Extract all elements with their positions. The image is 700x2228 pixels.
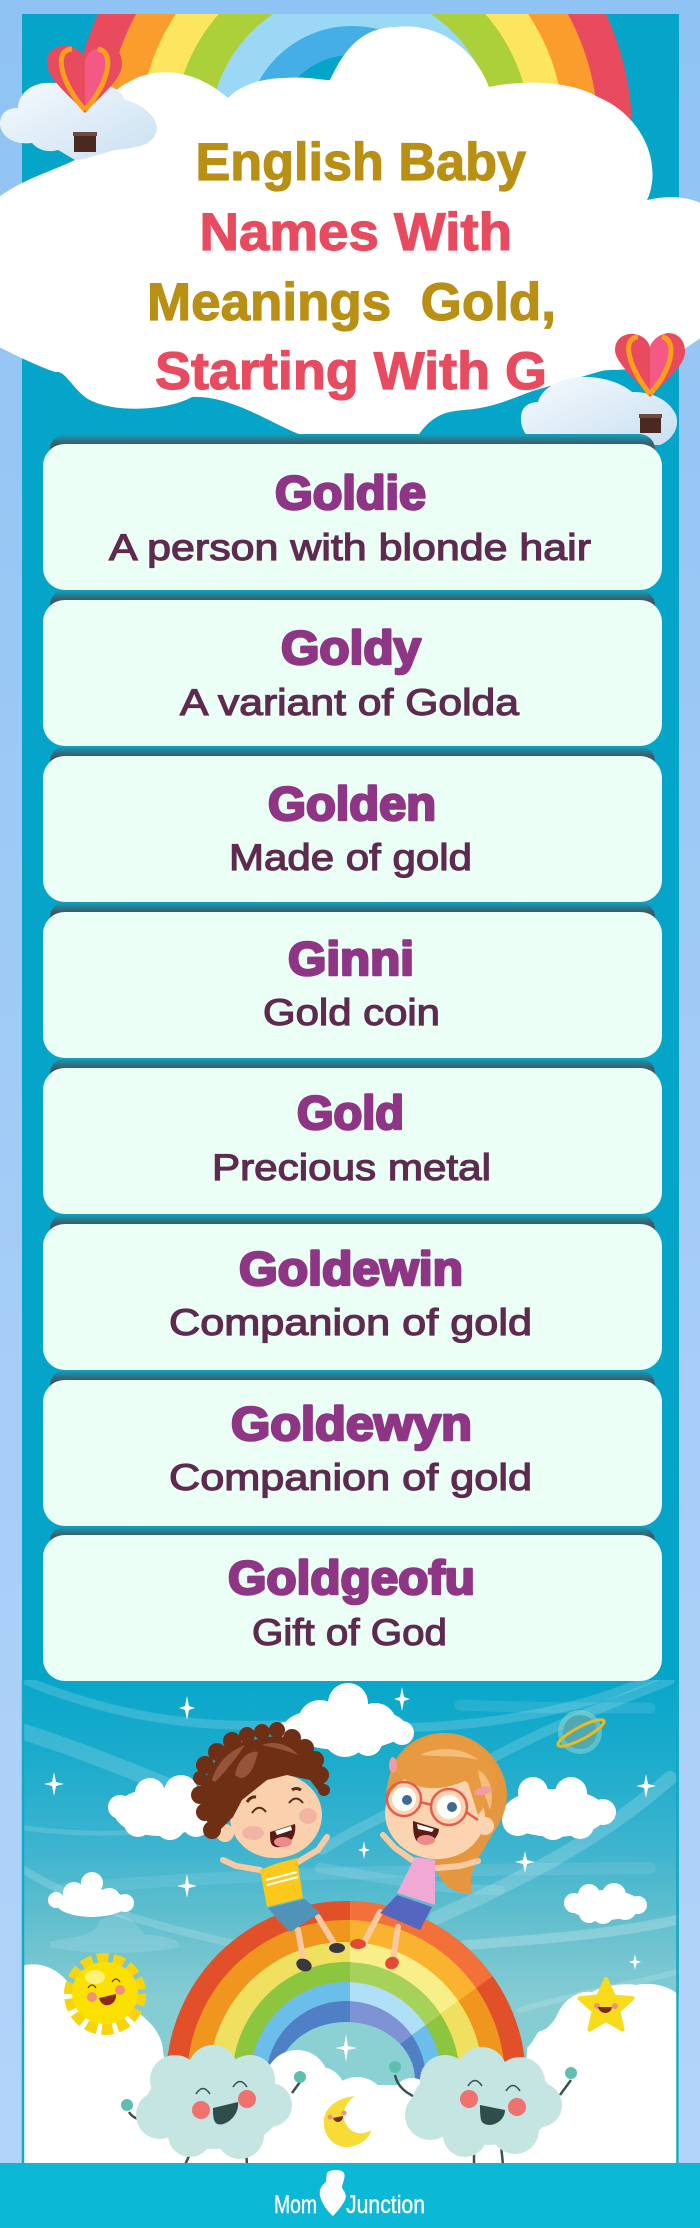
title: Starting With G: [155, 342, 547, 401]
logo wordmark: Mom: [274, 2191, 317, 2219]
card: Goldie: [43, 434, 662, 590]
boy shorts: [268, 1899, 320, 1932]
meaning: Gold: Precious metal: [212, 1146, 491, 1188]
girl face: [385, 1779, 485, 1860]
logo: MomJunction: [274, 2170, 425, 2219]
girl glasses: [387, 1782, 478, 1825]
right cloud face: [460, 2090, 478, 2108]
girl hair back: [388, 1733, 507, 1893]
logo icon: mother and child: [320, 2170, 346, 2216]
title: English Baby: [196, 133, 527, 192]
balloon: top left: [0, 45, 157, 160]
top rainbow: [73, 14, 632, 161]
faint cloud: [50, 1915, 180, 1953]
footer bar: [0, 2163, 700, 2228]
white clouds: [48, 1683, 647, 1924]
left cloud face: [192, 2101, 210, 2119]
boy shoes: [296, 1958, 312, 1972]
meaning: Goldie: A person with blonde hair: [109, 526, 591, 568]
girl arms and legs: [363, 1835, 478, 1960]
title cloud: [0, 26, 700, 437]
title: Names With: [200, 203, 512, 262]
meaning: Goldewyn: Companion of gold: [169, 1456, 532, 1498]
left cloud arms and legs: [129, 2082, 300, 2165]
meaning: Ginni: Gold coin: [263, 991, 440, 1033]
character: left cloud: [121, 2045, 306, 2165]
girl hair clips: [389, 1757, 397, 1773]
girl eyes: [392, 1787, 416, 1811]
meaning: Goldgeofu: Gift of God: [252, 1611, 447, 1653]
meaning: Goldy: A variant of Golda: [180, 681, 519, 723]
name: Goldy: Goldy: [281, 621, 421, 674]
meaning: Goldewin: Companion of gold: [169, 1301, 532, 1343]
white bumps under rainbow: [270, 2050, 420, 2110]
sky background: [24, 1684, 679, 2058]
title: Meanings Gold,: [147, 273, 556, 332]
card: Golden: [43, 746, 662, 902]
right cloud arms and legs: [395, 2075, 571, 2165]
girl skirt: [380, 1895, 432, 1930]
basket: [640, 416, 661, 433]
card: Goldewyn: [43, 1370, 662, 1526]
ground clouds: [22, 1964, 679, 2170]
illustration side borders: [23, 1680, 678, 2163]
character: right cloud: [389, 2047, 577, 2165]
name: Goldie: Goldie: [275, 466, 426, 519]
illustration: sky scene: [24, 1680, 679, 2163]
sky streaks: [24, 1668, 676, 2010]
card: Ginni: [43, 902, 662, 1058]
boy hair: [191, 1722, 330, 1839]
icon: sun: [70, 1959, 140, 2029]
girl ear: [480, 1817, 494, 1835]
heart balloon: [47, 45, 122, 113]
boy cheeks: [242, 1826, 264, 1840]
title: [147, 133, 556, 401]
small cloud right: [521, 377, 677, 445]
girl shoes: [350, 1939, 366, 1949]
boy hair highlights: [212, 1743, 298, 1782]
boy ear: [216, 1824, 234, 1842]
boy face: [230, 1775, 322, 1858]
small cloud left: [0, 83, 157, 160]
sparkles: [44, 1687, 656, 2062]
card: Goldewin: [43, 1214, 662, 1370]
boy shirt: [260, 1858, 303, 1907]
icon: moon: [324, 2096, 371, 2147]
character: boy: [191, 1722, 345, 1974]
boy eyes: [252, 1798, 303, 1813]
name: Golden: Golden: [268, 777, 436, 830]
name: Gold: Gold: [297, 1086, 404, 1139]
icon: star: [579, 1979, 633, 2030]
card: Goldy: [43, 590, 662, 746]
girl bangs: [386, 1770, 484, 1815]
card: Gold: [43, 1058, 662, 1214]
icon: planet: [555, 1710, 607, 1754]
boy arms and legs: [223, 1837, 335, 1958]
boy mouth: [270, 1824, 295, 1847]
logo: MomJunction: Junction: [346, 2191, 425, 2219]
main rainbow: [168, 1901, 524, 2080]
girl mouth: [413, 1821, 439, 1844]
name: Goldewin: Goldewin: [239, 1242, 463, 1295]
left cloud body: [136, 2045, 292, 2159]
name: Ginni: Ginni: [288, 932, 414, 985]
girl top: [397, 1857, 435, 1905]
character: girl: [350, 1733, 507, 1971]
name: Goldewyn: Goldewyn: [231, 1397, 472, 1450]
right cloud body: [405, 2047, 562, 2157]
heart balloon: [615, 333, 685, 397]
card: Goldgeofu: [43, 1526, 662, 1681]
basket: [74, 134, 96, 152]
name: Goldgeofu: Goldgeofu: [228, 1551, 475, 1604]
teal inner panel: [22, 14, 679, 1684]
balloon: bottom right: [521, 333, 685, 445]
meaning: Golden: Made of gold: [229, 836, 472, 878]
